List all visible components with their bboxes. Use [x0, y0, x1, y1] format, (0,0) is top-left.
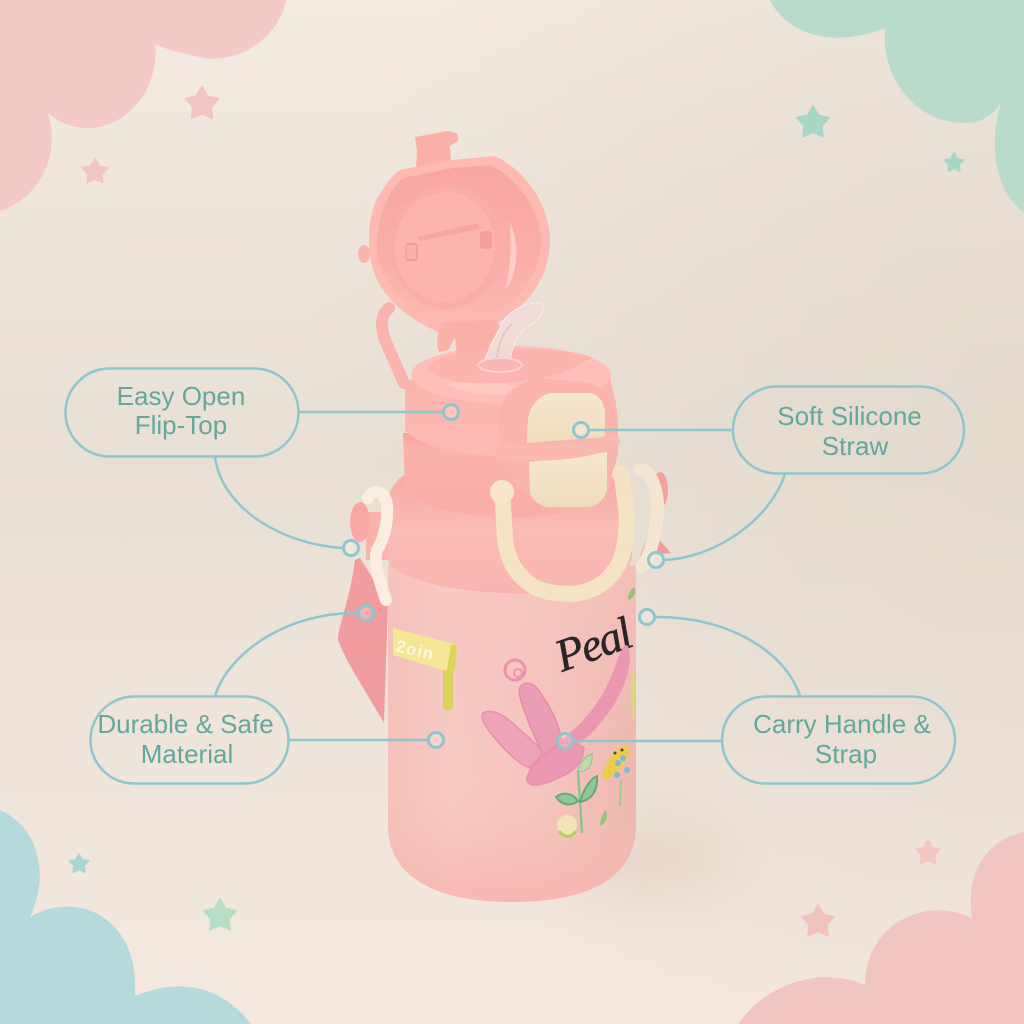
cloud: top right green — [770, 0, 1024, 213]
lid highlight — [505, 222, 516, 290]
curved connector: straw to right lug — [648, 474, 785, 568]
button housing — [498, 378, 618, 513]
label text: Durable & Safe — [97, 709, 274, 739]
cloud: bottom right pink — [738, 832, 1024, 1024]
leader line — [589, 429, 733, 431]
flip lid tab — [415, 131, 458, 170]
star: pink bottom right small — [916, 840, 940, 864]
decoration: green edge leaf — [631, 667, 635, 720]
callout: Easy Open Flip-Top — [66, 368, 458, 456]
left cream clip — [368, 492, 387, 600]
callout: Durable and Safe Material — [90, 696, 444, 784]
star: green top right small — [944, 152, 964, 171]
lid upper ring — [405, 368, 618, 456]
lid top surface — [411, 346, 611, 404]
star: pink top left small — [82, 158, 108, 183]
carry handle — [490, 465, 630, 594]
lid inner recess — [385, 179, 509, 315]
cream button upper — [527, 393, 605, 443]
leader line — [573, 740, 722, 742]
curved connector: material to strap — [215, 606, 374, 696]
bottle body — [388, 565, 636, 902]
cloud: bottom left blue — [0, 810, 251, 1024]
star: green bottom left — [204, 899, 236, 930]
curved connector: flip-top to left lug — [215, 457, 358, 556]
callout: Soft Silicone Straw — [574, 386, 964, 474]
marker — [574, 422, 588, 438]
label text: Material — [141, 739, 233, 769]
marker — [444, 404, 458, 420]
lid clip left — [406, 244, 417, 260]
decoration: handwritten name: Peal — [547, 607, 638, 682]
lid top highlight — [445, 380, 520, 395]
label text: Straw — [822, 431, 888, 461]
label text: Easy Open — [117, 381, 245, 411]
right lug — [652, 472, 668, 508]
label text: Carry Handle & — [753, 709, 931, 739]
star: green top right large — [797, 106, 829, 137]
decoration: top edge leaf — [628, 587, 635, 600]
label text: Flip-Top — [135, 410, 227, 440]
leader line — [298, 411, 443, 413]
label text: Soft Silicone — [777, 401, 922, 431]
star: pink top left large — [185, 86, 219, 118]
left lug — [350, 502, 370, 542]
straw — [478, 303, 543, 372]
callout: Carry Handle and Strap — [558, 696, 955, 784]
button band — [504, 441, 612, 453]
cloud: top left pink — [0, 0, 286, 211]
water bottle illustration — [338, 131, 671, 902]
decoration: yellow bug and blue flower — [602, 745, 630, 806]
lid clip bar — [417, 223, 480, 241]
cream button lower — [529, 452, 607, 507]
flip lid open — [369, 156, 550, 333]
lid inner disc — [390, 187, 500, 307]
strap: left pink flap — [338, 558, 388, 723]
lid top inset — [428, 349, 592, 383]
label text: Strap — [815, 739, 877, 769]
decoration: yellow flag — [393, 628, 457, 711]
hinge block — [437, 320, 500, 354]
lid lower ring — [403, 433, 565, 517]
bottle shadow — [560, 818, 730, 898]
decoration: pink dragonfly — [482, 645, 630, 785]
curved connector: handle to bottle edge — [640, 610, 800, 696]
collar shoulder — [388, 473, 632, 594]
marker — [558, 734, 572, 748]
decoration: plant — [556, 754, 607, 836]
left lug mount — [366, 512, 392, 560]
flip lid nub — [358, 245, 370, 263]
leader line — [288, 739, 428, 741]
star: pink bottom right large — [802, 905, 834, 936]
right cream clip — [640, 470, 657, 567]
flip lid hinge arm — [382, 308, 404, 383]
marker — [428, 732, 444, 748]
star: blue bottom left — [69, 854, 89, 872]
strap: right pink flap — [640, 530, 671, 556]
lid clip right — [481, 232, 491, 248]
flag text: 2oin — [394, 636, 436, 664]
